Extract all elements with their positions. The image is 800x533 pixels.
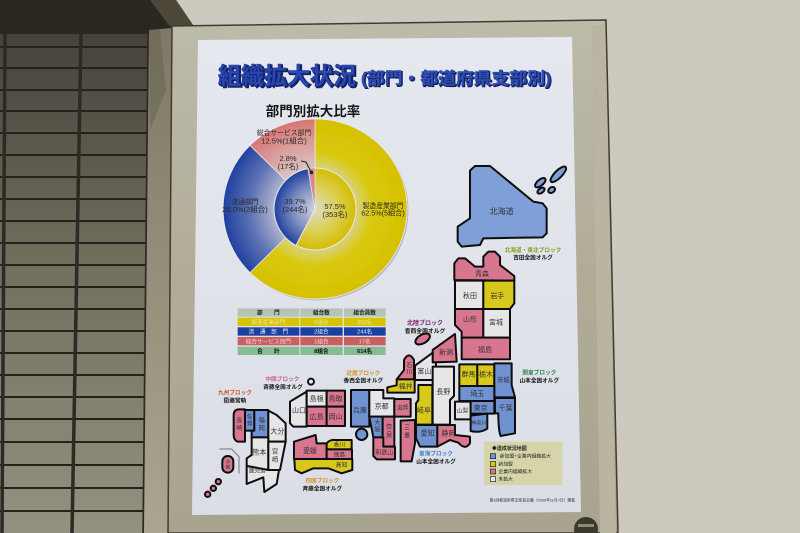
legend bbox=[484, 442, 562, 485]
door side strip bbox=[592, 24, 616, 533]
Hiroshima bbox=[307, 407, 327, 426]
Ishikawa: 川 bbox=[406, 369, 412, 376]
row: total bbox=[238, 347, 386, 355]
labels: (17名) bbox=[278, 161, 299, 171]
Kochi bbox=[294, 459, 352, 473]
map: Hokkaido and Tohoku bbox=[454, 164, 568, 359]
Nara: 良 bbox=[386, 430, 393, 439]
Tochigi bbox=[477, 364, 494, 386]
Gunma bbox=[459, 364, 477, 386]
Hokkaido-Tohoku block label: 北海道・東北ブロック bbox=[505, 246, 562, 254]
Saitama bbox=[459, 386, 494, 401]
Okinawa routing line bbox=[219, 449, 239, 473]
inner ring: manufacturing bbox=[296, 168, 356, 250]
Hokkaido-Tohoku block label: 吉田全国オルグ bbox=[513, 254, 553, 262]
Gunma: 群馬 bbox=[462, 370, 476, 379]
Ibaraki: 茨城 bbox=[497, 375, 510, 384]
Hokuriku block label: 香西全国オルグ bbox=[405, 327, 445, 335]
table header bbox=[238, 308, 386, 317]
Wakayama bbox=[373, 437, 395, 459]
row: total: 8組合 bbox=[314, 347, 329, 355]
Tokai block label: 山本全国オルグ bbox=[416, 457, 456, 465]
data table bbox=[238, 308, 386, 355]
Kinki block label: 香西全国オルグ bbox=[344, 377, 383, 385]
title: 組織拡大状況 bbox=[218, 63, 356, 89]
row: general services bbox=[238, 337, 386, 345]
Kyushu block label bbox=[218, 389, 252, 404]
Shizuoka: 静岡 bbox=[441, 428, 455, 437]
map: Kyushu, Chugoku and Shikoku bbox=[205, 375, 352, 497]
Yamaguchi bbox=[290, 392, 307, 427]
row: manufacturing: 製造産業部門 bbox=[251, 318, 286, 326]
labels: (353名) bbox=[322, 209, 348, 219]
Okayama bbox=[327, 407, 345, 426]
pillar beside blind bbox=[144, 28, 172, 533]
Fukui bbox=[387, 379, 415, 393]
Shizuoka bbox=[437, 425, 470, 447]
outer ring: general services bbox=[250, 119, 315, 209]
Yamanashi: 山梨 bbox=[457, 406, 469, 414]
Hokuriku block label bbox=[405, 319, 445, 335]
Saga bbox=[245, 410, 254, 431]
Miyagi bbox=[483, 309, 510, 338]
Tokyo bbox=[471, 401, 494, 414]
Kyushu block label: 衛藤常執 bbox=[224, 396, 247, 404]
Yamanashi bbox=[455, 402, 471, 419]
shadow on pillar bbox=[149, 29, 166, 130]
Fukuoka bbox=[252, 410, 268, 437]
Miyazaki: 崎 bbox=[272, 454, 279, 463]
title: 組織拡大状況 bbox=[220, 64, 358, 90]
Kanto block label: 関東ブロック bbox=[522, 369, 557, 377]
row: general services: 17名 bbox=[359, 337, 371, 345]
Akita bbox=[455, 281, 483, 309]
Niigata bbox=[433, 334, 457, 362]
Nagano: 長野 bbox=[436, 388, 450, 396]
row: total: 合 計 bbox=[257, 347, 280, 355]
inner ring: general services bbox=[308, 168, 315, 209]
labels: 25.0%(2組合) bbox=[222, 204, 268, 214]
Mie: 三 bbox=[404, 424, 410, 431]
labels: (244名) bbox=[282, 204, 308, 214]
labels: 12.5%(1組合) bbox=[261, 136, 307, 146]
row: general services: 総合サービス部門 bbox=[246, 337, 291, 345]
Shiga bbox=[394, 399, 411, 417]
Miyagi: 宮城 bbox=[489, 318, 503, 327]
dark ceiling shadow bbox=[0, 0, 193, 34]
Hokuriku block label: 北陸ブロック bbox=[407, 319, 443, 327]
Kinki block label: 近畿ブロック bbox=[346, 369, 381, 377]
door panel bbox=[168, 20, 618, 533]
Tochigi: 栃木 bbox=[479, 370, 493, 379]
Wakayama: 和歌山 bbox=[375, 449, 393, 457]
Oki island bbox=[308, 379, 314, 385]
row: general services: 1組合 bbox=[314, 337, 329, 345]
labels: 総合サービス部門 bbox=[257, 128, 311, 137]
table header: 組合員数 bbox=[353, 309, 376, 317]
Yamaguchi: 山口 bbox=[292, 406, 306, 414]
Hokkaido-Tohoku block label bbox=[505, 246, 562, 262]
row: total: 614名 bbox=[357, 347, 373, 355]
title: (部門・都道府県支部別) bbox=[362, 69, 552, 89]
Akita: 秋田 bbox=[463, 291, 477, 300]
labels: 製造産業部門 bbox=[363, 201, 404, 210]
Okinawa: 縄 bbox=[225, 464, 230, 471]
Nagano bbox=[433, 367, 454, 425]
subtitle: (部門・都道府県支部別) bbox=[361, 68, 551, 88]
Iwate bbox=[483, 281, 514, 309]
Okinawa: 沖 bbox=[225, 459, 230, 466]
Fukuoka: 福 bbox=[258, 415, 265, 424]
Shikoku block label bbox=[303, 477, 342, 492]
Awaji island bbox=[356, 429, 367, 440]
Kochi: 高知 bbox=[336, 461, 348, 469]
Tokyo: 東京 bbox=[474, 403, 488, 412]
row: distribution bbox=[238, 327, 386, 336]
title bbox=[218, 63, 552, 90]
Mie: 重 bbox=[404, 431, 410, 439]
table header: 組合数 bbox=[313, 309, 330, 317]
Shimane bbox=[307, 391, 327, 407]
labels: 62.5%(5組合) bbox=[361, 208, 405, 218]
Gifu: 岐阜 bbox=[417, 406, 431, 415]
legend: internal expansion: 企業内組織拡大 bbox=[498, 468, 532, 475]
Fukushima bbox=[462, 338, 510, 359]
door frame edge bbox=[150, 0, 193, 28]
Toyama: 富山 bbox=[417, 367, 431, 376]
labels: 流通部門 bbox=[231, 197, 259, 206]
Saitama: 埼玉 bbox=[470, 389, 484, 398]
Aichi bbox=[416, 425, 437, 447]
row: manufacturing bbox=[238, 318, 386, 326]
footer note: 第2回都道府県支部長会議（2009年11月7日）開催 bbox=[489, 498, 575, 503]
Ehime bbox=[294, 435, 327, 459]
Kagawa bbox=[327, 440, 352, 449]
Nagasaki bbox=[234, 409, 245, 442]
labels: 57.5% bbox=[324, 202, 346, 211]
Tokushima: 徳島 bbox=[334, 450, 345, 458]
Hyogo bbox=[351, 390, 369, 427]
Aichi: 愛知 bbox=[421, 428, 435, 437]
Miyazaki: 宮 bbox=[272, 446, 278, 455]
Oita: 大分 bbox=[270, 426, 284, 435]
Kyoto: 京都 bbox=[375, 402, 389, 410]
Kumamoto bbox=[247, 437, 268, 470]
Fukushima: 福島 bbox=[478, 345, 492, 354]
Nara: 奈 bbox=[386, 422, 393, 431]
Aomori bbox=[454, 252, 514, 281]
Nagasaki: 長 bbox=[236, 418, 242, 425]
northern islands bbox=[534, 164, 568, 195]
Aomori: 青森 bbox=[475, 269, 489, 278]
Fukuoka: 岡 bbox=[258, 424, 265, 432]
Ishikawa bbox=[397, 355, 414, 379]
Chiba bbox=[495, 398, 515, 436]
legend: new: 新加盟 bbox=[498, 461, 513, 468]
Sado island bbox=[414, 331, 432, 347]
donut chart bbox=[222, 119, 408, 300]
row: distribution: 2組合 bbox=[314, 328, 329, 336]
Hiroshima: 広島 bbox=[310, 412, 324, 421]
map: central Japan and Kanto bbox=[344, 331, 575, 503]
Ibaraki bbox=[494, 363, 515, 397]
Tokai block label: 東海ブロック bbox=[419, 450, 453, 458]
Ishikawa: 石 bbox=[406, 362, 412, 369]
window blind bbox=[0, 34, 149, 533]
Miyazaki bbox=[268, 442, 286, 470]
Iwate: 岩手 bbox=[490, 291, 504, 300]
Saga: 佐 bbox=[247, 413, 253, 421]
row: manufacturing: 5組合 bbox=[314, 318, 329, 326]
Tottori: 鳥取 bbox=[329, 394, 343, 403]
Saga: 賀 bbox=[247, 420, 253, 428]
Kanto block label bbox=[520, 369, 559, 384]
row: manufacturing: 353名 bbox=[357, 318, 373, 326]
Nagasaki: 崎 bbox=[236, 424, 242, 432]
table header: 部 門 bbox=[257, 309, 280, 317]
door knob bbox=[574, 517, 598, 533]
legend: no expansion: 未拡大 bbox=[498, 476, 513, 483]
Hokkaido bbox=[458, 166, 547, 247]
legend: new plus expansion: 新加盟+企業内組織拡大 bbox=[500, 453, 551, 460]
Shimane: 島根 bbox=[310, 394, 324, 403]
Mie bbox=[401, 420, 415, 461]
Kagoshima: 鹿児島 bbox=[249, 467, 266, 475]
Kyushu block label: 九州ブロック bbox=[218, 389, 252, 397]
outer ring: distribution bbox=[223, 145, 315, 273]
Okinawa bbox=[222, 456, 233, 473]
Okayama: 岡山 bbox=[329, 413, 343, 421]
Kyoto bbox=[369, 390, 394, 417]
Shiga: 滋賀 bbox=[397, 403, 409, 411]
Shikoku block label: 斉藤全国オルグ bbox=[303, 484, 342, 492]
Kagawa: 香川 bbox=[334, 440, 345, 448]
Kumamoto: 熊本 bbox=[252, 448, 266, 457]
inner ring: distribution bbox=[274, 169, 315, 245]
legend: ◆達成状況地図 bbox=[492, 445, 527, 452]
chart title: 部門別拡大比率 bbox=[266, 103, 360, 119]
southern islands bbox=[205, 479, 221, 497]
Osaka: 阪 bbox=[374, 426, 380, 434]
Chugoku block label: 斉藤全国オルグ bbox=[263, 383, 303, 391]
row: distribution: 流 通 部 門 bbox=[249, 328, 288, 336]
Tottori bbox=[327, 391, 345, 407]
Niigata: 新潟 bbox=[439, 348, 453, 357]
Kanagawa: 神奈川 bbox=[472, 419, 486, 426]
Kagoshima bbox=[247, 466, 279, 492]
Ehime: 愛媛 bbox=[303, 446, 317, 455]
callout dot bbox=[310, 171, 313, 174]
Shikoku block label: 四国ブロック bbox=[305, 477, 340, 485]
Hokkaido: 北海道 bbox=[490, 206, 514, 216]
Tokai block label bbox=[416, 450, 456, 465]
Chugoku block label bbox=[263, 375, 303, 391]
row: distribution: 244名 bbox=[357, 328, 373, 336]
Chiba: 千葉 bbox=[499, 403, 513, 412]
labels: 2.8% bbox=[279, 154, 297, 163]
labels bbox=[222, 128, 405, 219]
poster sheet bbox=[192, 37, 581, 515]
Osaka bbox=[369, 417, 383, 437]
Kanto block label: 山本全国オルグ bbox=[520, 376, 559, 384]
Fukui: 福井 bbox=[399, 382, 413, 391]
outer ring: manufacturing bbox=[250, 119, 407, 299]
Tokushima bbox=[327, 449, 352, 459]
Kanagawa bbox=[471, 414, 487, 432]
Chugoku block label: 中国ブロック bbox=[265, 375, 300, 383]
Hyogo: 兵庫 bbox=[353, 406, 367, 415]
Osaka: 大 bbox=[374, 419, 380, 427]
Nara bbox=[383, 417, 394, 447]
callout arrow bbox=[301, 161, 311, 172]
Gifu bbox=[416, 385, 432, 425]
Yamagata: 山形 bbox=[463, 315, 477, 323]
pie shadow bbox=[224, 120, 408, 300]
labels: 39.7% bbox=[284, 197, 306, 206]
Yamagata bbox=[455, 309, 483, 338]
Kinki block label bbox=[344, 369, 383, 385]
Toyama bbox=[415, 353, 436, 380]
Oita bbox=[268, 411, 286, 442]
